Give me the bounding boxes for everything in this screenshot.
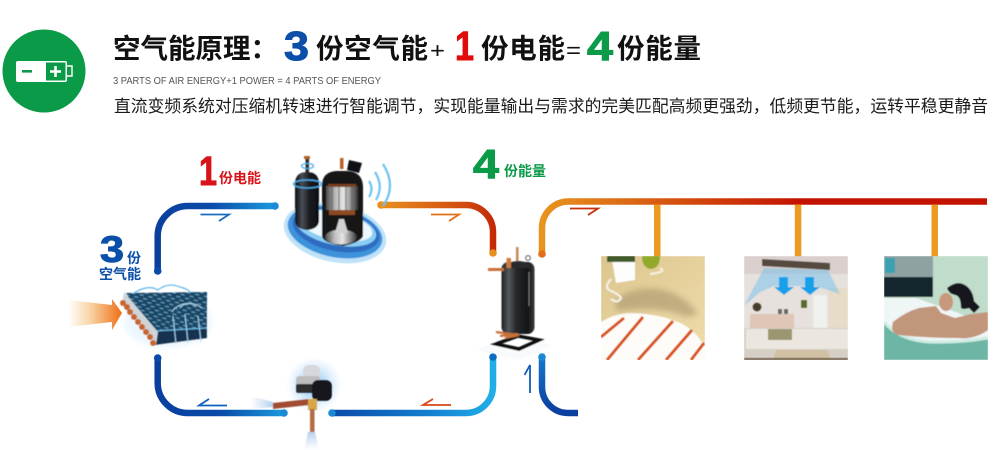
- title: =: [566, 38, 581, 63]
- label: 3 parts air energy: 3: [100, 229, 124, 270]
- title: 1: [455, 23, 474, 69]
- label: 1 part electricity: 1: [199, 148, 217, 194]
- pipes: orange branches: [654, 204, 938, 256]
- pipe: top left blue: [154, 202, 279, 275]
- accumulator cylinder: [294, 156, 322, 230]
- flow arrow: top left: [200, 214, 229, 221]
- flow arrow: return vertical: [524, 365, 530, 393]
- flow arrow: hot water line: [570, 208, 598, 215]
- label: 1 part electricity: 份电能: [219, 170, 261, 186]
- title: 份电能: [481, 33, 565, 64]
- label: 4 parts energy: [473, 141, 546, 187]
- label: 3 parts air energy: 份: [127, 250, 141, 266]
- title: 份能量: [617, 33, 701, 64]
- pipe: bottom middle blue: [328, 353, 497, 417]
- icon: orange intake arrow: [68, 299, 122, 330]
- label: 1 part electricity: [199, 148, 261, 194]
- label: 4 parts energy: 4: [473, 141, 499, 187]
- title: 份空气能: [316, 33, 428, 64]
- pipe: hot water main line: [538, 202, 987, 258]
- title: 空气能原理：: [113, 33, 278, 64]
- title: 4: [587, 23, 613, 69]
- description text: 直流变频系统对压缩机转速进行智能调节，实现能量输出与需求的完美匹配高频更强劲，低频更节能，运转平稳更静音: [114, 97, 988, 116]
- title: [113, 23, 701, 69]
- copper tube ends: [120, 300, 156, 346]
- icon: expansion valve: [250, 357, 342, 450]
- photo: woman in bath: [884, 256, 988, 360]
- pipe: bottom right return: [538, 353, 578, 413]
- swirl rings: [278, 194, 392, 272]
- flow arrow: bottom middle: [423, 399, 451, 405]
- label: 3 parts air energy: [99, 229, 141, 282]
- title: 3: [284, 23, 309, 69]
- photo: underfloor heating: [601, 256, 705, 360]
- compressor body: [322, 158, 363, 246]
- label: 3 parts air energy: 空气能: [99, 266, 141, 282]
- subtitle: 3 PARTS OF AIR ENERGY+1 POWER = 4 PARTS OF ENERGY: [113, 75, 381, 87]
- photo: air conditioned living room: [744, 256, 848, 360]
- title: +: [430, 38, 445, 63]
- flow arrow: top orange: [431, 214, 459, 221]
- icon: green battery badge: [2, 30, 86, 112]
- label: 4 parts energy: 份能量: [504, 163, 546, 179]
- icon: evaporator coil: [120, 285, 212, 348]
- sound waves: [369, 164, 390, 206]
- icon: water tank: [477, 247, 551, 360]
- icon: compressor: [278, 156, 392, 272]
- pipe: bottom left blue: [154, 354, 288, 417]
- pipe: top orange: [377, 201, 497, 257]
- flow arrow: bottom left: [199, 399, 227, 406]
